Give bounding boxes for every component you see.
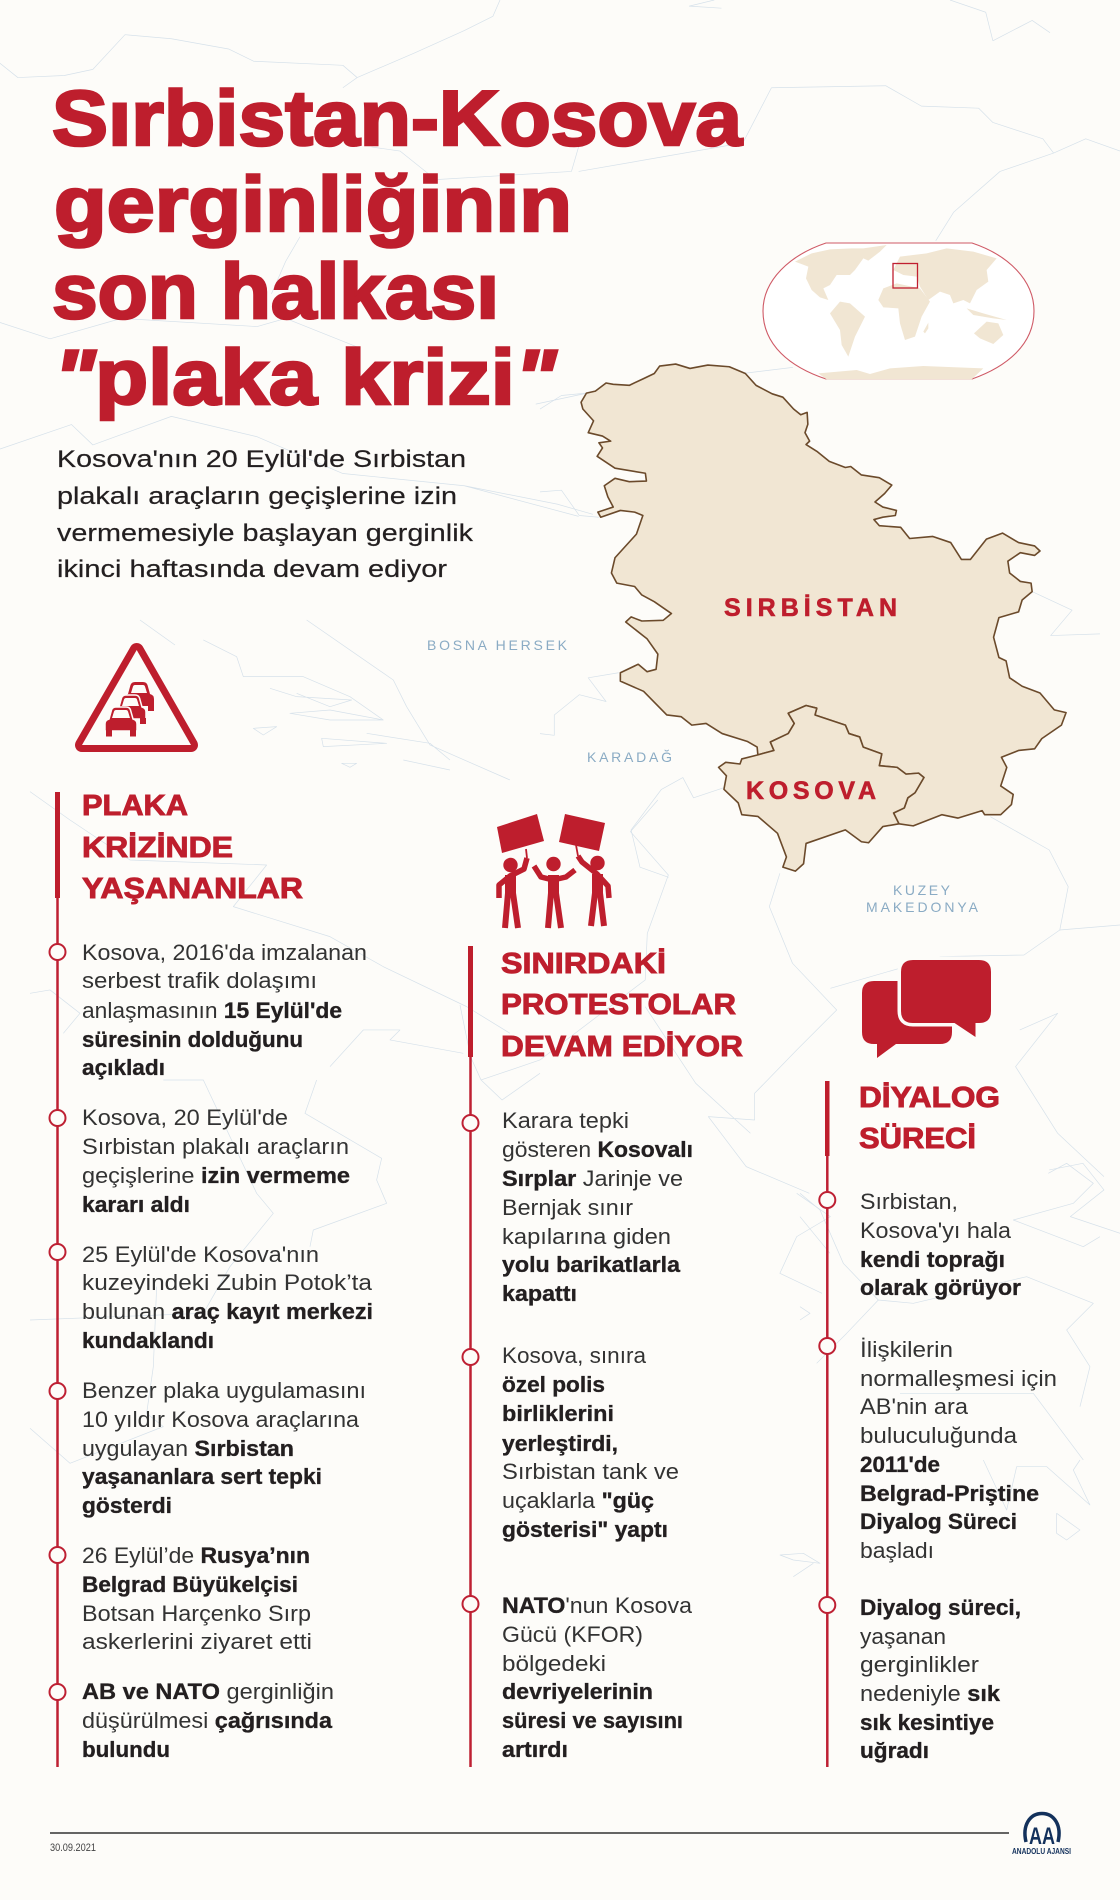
title: Sırbistan-Kosova	[52, 74, 743, 162]
heading: plaka krizinde yaşananlar: PLAKA	[82, 790, 188, 822]
item: kesintiye uğradı: sık kesintiye	[860, 1710, 994, 1735]
heading: diyalog süreci: SÜRECİ	[859, 1122, 976, 1155]
logo: Anadolu Ajansı: AA	[1029, 1823, 1055, 1850]
item: Sırbistan tepkisi: gösterdi	[82, 1493, 172, 1518]
item: Sırbistan tepkisi: Benzer plaka uygulamasını	[82, 1378, 366, 1403]
item: 15 Eylül: serbest trafik dolaşımı	[82, 968, 317, 993]
item: kendi toprağı: Sırbistan,	[860, 1189, 958, 1214]
title: gerginliğinin	[54, 160, 572, 248]
item: 26 Eylül: Botsan Harçenko Sırp	[82, 1601, 311, 1626]
item: NATO KFOR	[462, 1593, 692, 1762]
item: 2011 diyalog: Belgrad-Priştine	[860, 1481, 1039, 1506]
item: NATO KFOR: bölgedeki	[502, 1651, 606, 1676]
item: Sırbistan tepkisi: uygulayan Sırbistan	[82, 1436, 294, 1461]
item: 26 Eylül: askerlerini ziyaret etti	[82, 1629, 312, 1654]
map shape: Serbia	[581, 364, 1066, 826]
item: 25 Eylül: kuzeyindeki Zubin Potok’ta	[82, 1270, 373, 1295]
label: Sırbistan: SIRBİSTAN	[724, 594, 897, 622]
item: 2011 diyalog: İlişkilerin	[860, 1337, 953, 1362]
item: kendi toprağı	[819, 1189, 1021, 1300]
item: özel polis: birliklerini	[502, 1401, 614, 1426]
item: özel polis	[462, 1343, 679, 1542]
item: kesintiye uğradı: yaşanan	[860, 1624, 946, 1649]
intro text: ikinci haftasında devam ediyor	[57, 556, 447, 583]
item: Kosovalı Sırplar: Bernjak sınır	[502, 1195, 634, 1220]
item: NATO KFOR: devriyelerinin	[502, 1679, 653, 1704]
item: özel polis: Kosova, sınıra	[502, 1343, 646, 1368]
heading: diyalog süreci	[859, 1082, 1000, 1155]
item: özel polis: Sırbistan tank ve	[502, 1459, 679, 1484]
title: "plaka krizi "	[54, 333, 557, 421]
item: Sırbistan tepkisi	[50, 1378, 366, 1518]
item: 2011 diyalog: buluculuğunda	[860, 1423, 1018, 1448]
item: AB ve NATO: AB ve NATO gerginliğin	[82, 1679, 334, 1704]
intro text	[57, 446, 474, 583]
item: 26 Eylül	[50, 1543, 312, 1654]
heading: plaka krizinde yaşananlar	[82, 790, 303, 905]
item: 20 Eylül: Sırbistan plakalı araçların	[82, 1134, 349, 1159]
heading: sınırdaki protestolar devam ediyor: SINIRDAKİ	[501, 948, 666, 980]
world locator map	[763, 243, 1034, 379]
label: Kosova: KOSOVA	[746, 777, 876, 805]
item: AB ve NATO: düşürülmesi çağrısında	[82, 1708, 333, 1733]
item: 26 Eylül: 26 Eylül’de Rusya’nın	[82, 1543, 310, 1568]
item: özel polis: uçaklarla "güç	[502, 1488, 654, 1513]
item: 15 Eylül: anlaşmasının 15 Eylül'de	[82, 998, 342, 1023]
item: 20 Eylül: Kosova, 20 Eylül'de	[82, 1105, 288, 1130]
intro text: vermemesiyle başlayan gerginlik	[57, 520, 474, 547]
icon: traffic warning triangle	[82, 650, 191, 745]
label: Makedonya: MAKEDONYA	[866, 899, 979, 915]
item: 2011 diyalog: normalleşmesi için	[860, 1366, 1057, 1391]
item: 2011 diyalog: Diyalog Süreci	[860, 1509, 1017, 1534]
item: kendi toprağı: Kosova'yı hala	[860, 1218, 1011, 1243]
item: AB ve NATO	[50, 1679, 334, 1762]
item: kendi toprağı: kendi toprağı	[860, 1247, 1005, 1272]
item: Kosovalı Sırplar: yolu barikatlarla	[502, 1252, 680, 1277]
item: NATO KFOR: NATO'nun Kosova	[502, 1593, 692, 1618]
map shape: Kosovo	[719, 706, 924, 871]
item: 2011 diyalog	[819, 1337, 1057, 1563]
item: 25 Eylül: bulunan araç kayıt merkezi	[82, 1299, 373, 1324]
item: kesintiye uğradı: Diyalog süreci,	[860, 1595, 1021, 1620]
timeline: heading bar and line	[825, 1081, 830, 1767]
item: 2011 diyalog: başladı	[860, 1538, 934, 1563]
item: Sırbistan tepkisi: yaşananlara sert tepki	[82, 1464, 322, 1489]
title: son halkası	[52, 247, 499, 335]
item: özel polis: yerleştirdi,	[502, 1431, 618, 1456]
icon: protesters with signs	[497, 814, 609, 928]
item: kesintiye uğradı	[819, 1595, 1021, 1763]
panel: diyalog süreci	[819, 960, 1057, 1767]
item: 25 Eylül: kundaklandı	[82, 1328, 214, 1353]
title	[52, 74, 743, 421]
item: 25 Eylül	[50, 1242, 373, 1353]
heading: sınırdaki protestolar devam ediyor	[501, 948, 743, 1063]
item: 20 Eylül: kararı aldı	[82, 1192, 190, 1217]
item: NATO KFOR: Gücü (KFOR)	[502, 1622, 643, 1647]
item: Kosovalı Sırplar	[462, 1108, 693, 1306]
footer rule	[50, 1832, 1009, 1834]
item: 2011 diyalog: 2011'de	[860, 1452, 940, 1477]
item: kesintiye uğradı: gerginlikler	[860, 1652, 980, 1677]
intro text: Kosova'nın 20 Eylül'de Sırbistan	[57, 446, 466, 473]
item: özel polis: gösterisi" yaptı	[502, 1517, 668, 1542]
map: Serbia and Kosovo	[427, 364, 1066, 915]
item: 15 Eylül: süresinin dolduğunu	[82, 1027, 303, 1052]
date: 30.09.2021	[50, 1842, 96, 1854]
item: 2011 diyalog: AB'nin ara	[860, 1394, 969, 1419]
heading: sınırdaki protestolar devam ediyor: PROTESTOLAR	[501, 989, 736, 1021]
item: 15 Eylül: Kosova, 2016'da imzalanan	[82, 940, 367, 965]
item: kesintiye uğradı: uğradı	[860, 1738, 929, 1763]
item: Kosovalı Sırplar: Karara tepki	[502, 1108, 629, 1133]
heading: diyalog süreci: DİYALOG	[859, 1082, 1000, 1114]
panel: plaka krizinde yaşananlar	[50, 650, 373, 1767]
logo: Anadolu Ajansı: ANADOLU AJANSI	[1012, 1847, 1071, 1856]
heading: plaka krizinde yaşananlar: YAŞANANLAR	[82, 873, 303, 905]
logo: Anadolu Ajansı	[1012, 1814, 1071, 1856]
footer	[50, 1814, 1071, 1856]
item: Kosovalı Sırplar: Sırplar Jarinje ve	[502, 1166, 683, 1191]
item: Kosovalı Sırplar: kapattı	[502, 1281, 577, 1306]
item: Kosovalı Sırplar: kapılarına giden	[502, 1224, 671, 1249]
heading: plaka krizinde yaşananlar: KRİZİNDE	[82, 832, 233, 864]
timeline: heading bar and line	[55, 792, 60, 1767]
item: Sırbistan tepkisi: 10 yıldır Kosova araçlarına	[82, 1407, 360, 1432]
label: Karadağ: KARADAĞ	[587, 749, 672, 765]
item: 20 Eylül: geçişlerine izin vermeme	[82, 1163, 350, 1188]
label: Kuzey: KUZEY	[893, 882, 951, 898]
intro text: plakalı araçların geçişlerine izin	[57, 483, 457, 510]
item: AB ve NATO: bulundu	[82, 1737, 170, 1762]
icon: speech bubbles	[862, 960, 991, 1058]
heading: sınırdaki protestolar devam ediyor: DEVAM EDİYOR	[501, 1031, 743, 1063]
item: 25 Eylül: 25 Eylül'de Kosova'nın	[82, 1242, 319, 1267]
item: NATO KFOR: artırdı	[502, 1737, 568, 1762]
item: 20 Eylül	[50, 1105, 350, 1217]
item: Kosovalı Sırplar: gösteren Kosovalı	[502, 1137, 693, 1162]
item: kendi toprağı: olarak görüyor	[860, 1275, 1021, 1300]
item: 15 Eylül	[50, 940, 367, 1080]
panel: sınırdaki protestolar	[462, 814, 743, 1767]
item: kesintiye uğradı: nedeniyle sık	[860, 1681, 1001, 1706]
label: Bosna Hersek: BOSNA HERSEK	[427, 637, 568, 653]
timeline: heading bar and line	[468, 946, 473, 1767]
item: özel polis: özel polis	[502, 1372, 605, 1397]
item: NATO KFOR: süresi ve sayısını	[502, 1708, 683, 1733]
item: 15 Eylül: açıkladı	[82, 1055, 165, 1080]
item: 26 Eylül: Belgrad Büyükelçisi	[82, 1572, 298, 1597]
